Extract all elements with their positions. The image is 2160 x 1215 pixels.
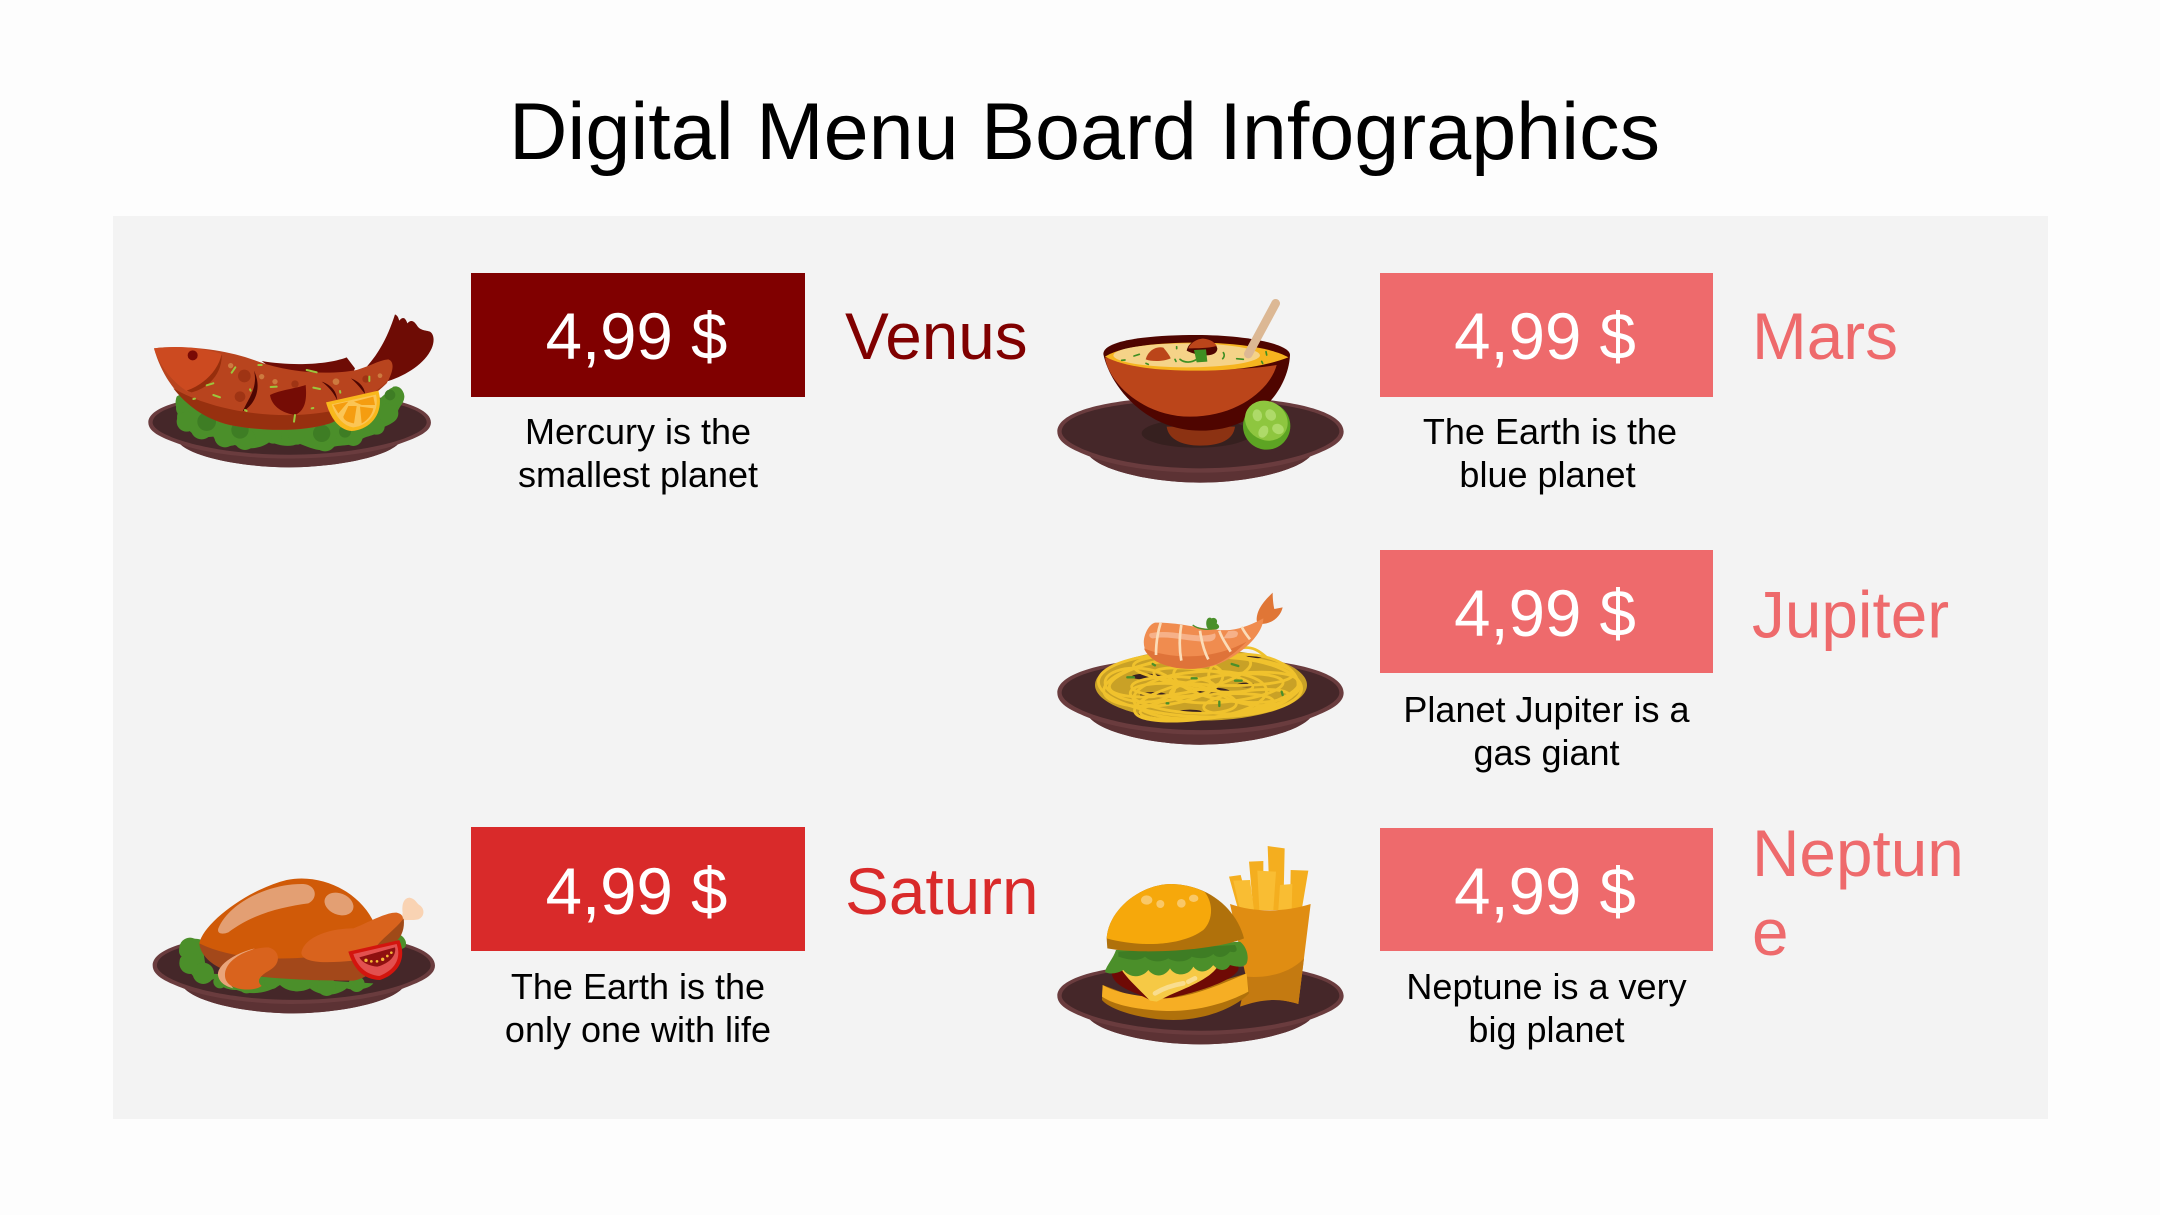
price box <box>1380 550 1713 673</box>
item name: Venus <box>845 300 1028 373</box>
item name: Neptun <box>1752 817 1964 890</box>
price box <box>471 827 805 951</box>
price: 4,99 $ <box>1454 577 1636 650</box>
icon: soup bowl on a plate <box>1057 303 1344 483</box>
description <box>1423 411 1677 495</box>
lemon wedge <box>326 391 380 431</box>
lime wedge <box>1238 393 1295 450</box>
description: The Earth is the <box>1423 411 1677 452</box>
item name <box>1752 817 1964 969</box>
price: 4,99 $ <box>1454 300 1636 373</box>
menu item: Mars <box>1057 273 1898 495</box>
menu item: Jupiter <box>1057 550 1949 773</box>
price: 4,99 $ <box>546 855 727 928</box>
icon: pasta with shrimp on a plate <box>1057 593 1344 745</box>
icon: roast turkey on a plate <box>153 879 435 1013</box>
description: Mercury is the <box>525 411 751 452</box>
item name: Mars <box>1752 300 1898 373</box>
price: 4,99 $ <box>1454 855 1636 928</box>
description: only one with life <box>505 1009 771 1050</box>
icon: burger and fries on a plate <box>1057 846 1344 1044</box>
description: Planet Jupiter is a <box>1403 689 1691 730</box>
fries <box>1229 846 1311 1007</box>
menu item: Saturn <box>153 827 1039 1050</box>
description <box>1403 689 1691 773</box>
background panel <box>113 216 2048 1119</box>
description: smallest planet <box>518 454 758 495</box>
menu item: Neptune <box>1057 817 1964 1050</box>
item name: Saturn <box>845 855 1039 928</box>
price box <box>471 273 805 397</box>
burger <box>1102 884 1249 1020</box>
description <box>1406 966 1687 1050</box>
description: big planet <box>1468 1009 1625 1050</box>
menu item: Venus <box>148 273 1028 495</box>
item name: e <box>1752 896 1789 969</box>
description: gas giant <box>1473 732 1620 773</box>
description: Neptune is a very <box>1406 966 1687 1007</box>
item name: Jupiter <box>1752 578 1949 652</box>
description: blue planet <box>1459 454 1636 495</box>
price: 4,99 $ <box>546 300 727 373</box>
description <box>505 966 771 1050</box>
price box <box>1380 828 1713 951</box>
description: The Earth is the <box>511 966 765 1007</box>
icon: fish on a plate <box>148 314 434 467</box>
tomato slice <box>348 940 402 980</box>
title: Digital Menu Board Infographics <box>509 87 1660 177</box>
price box <box>1380 273 1713 397</box>
description <box>518 411 758 495</box>
